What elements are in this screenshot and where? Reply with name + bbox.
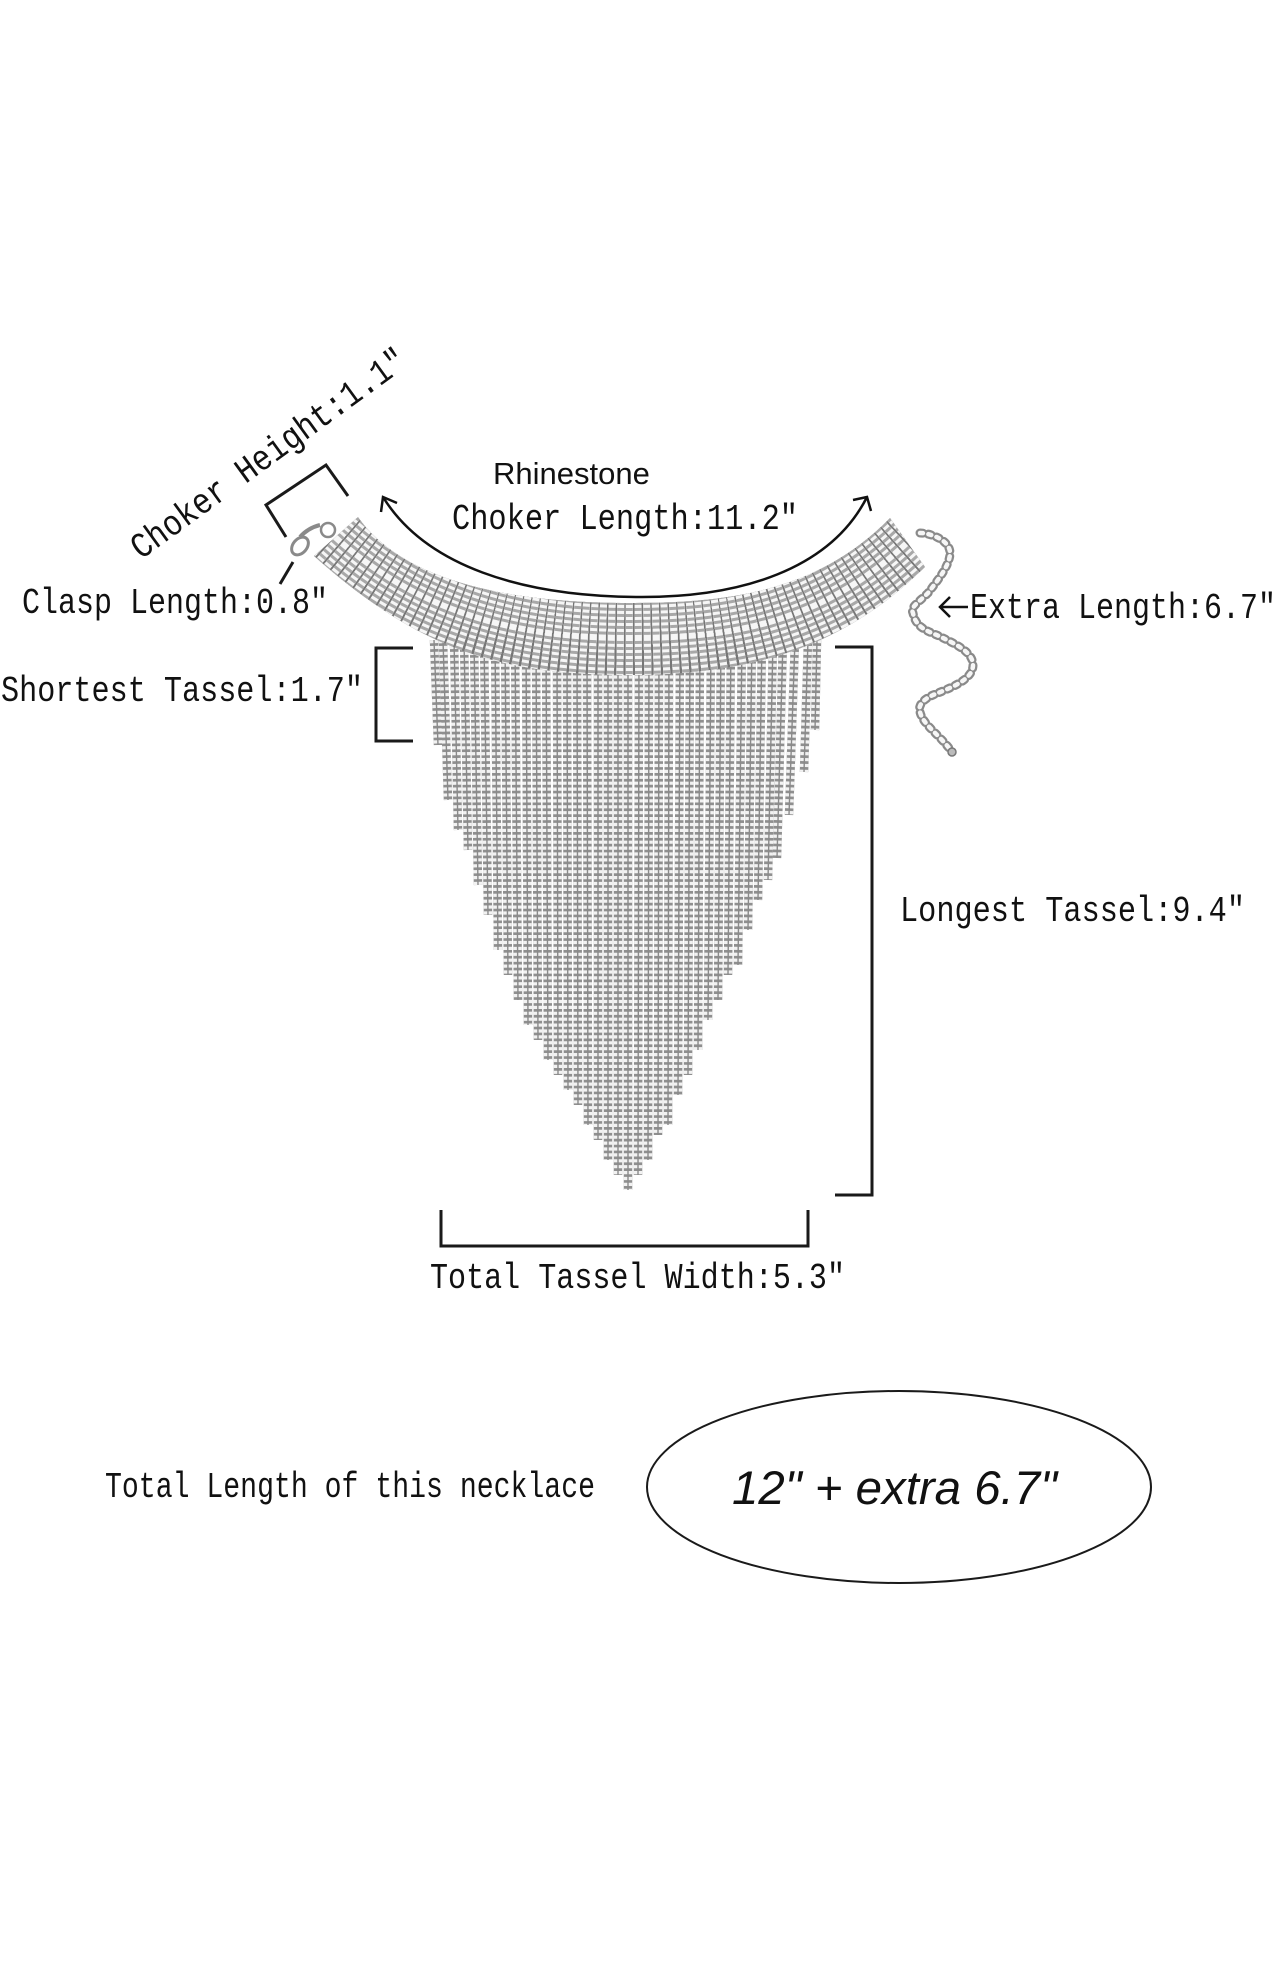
infographic canvas — [2, 346, 1272, 1584]
callout: total length ellipse: 12" + extra 6.7" — [732, 1461, 1059, 1514]
bracket: choker height — [266, 465, 348, 537]
arrow: choker length arc — [381, 497, 871, 597]
label: choker height: Choker Height:1.1" — [123, 341, 416, 569]
callout: total length ellipse — [647, 1391, 1151, 1583]
label: clasp length: Clasp Length:0.8" — [22, 583, 328, 624]
lobster clasp — [288, 523, 335, 558]
label: total length: Total Length of this necklace — [105, 1467, 595, 1508]
label: choker length: Choker Length:11.2" — [452, 499, 798, 540]
extender chain — [912, 533, 973, 756]
bracket: total tassel width — [441, 1210, 808, 1246]
bracket: shortest tassel — [376, 648, 413, 741]
bracket: longest tassel — [835, 647, 872, 1195]
necklace product image — [288, 523, 973, 1190]
rhinestone choker band — [322, 525, 925, 638]
arrow: extra length — [940, 597, 968, 617]
tick: clasp length — [280, 562, 293, 584]
tassel fringe — [434, 640, 817, 1190]
label: rhinestone: Rhinestone — [493, 456, 650, 491]
label: shortest tassel: Shortest Tassel:1.7" — [1, 671, 363, 712]
label: total tassel width: Total Tassel Width:5.3" — [430, 1258, 845, 1299]
